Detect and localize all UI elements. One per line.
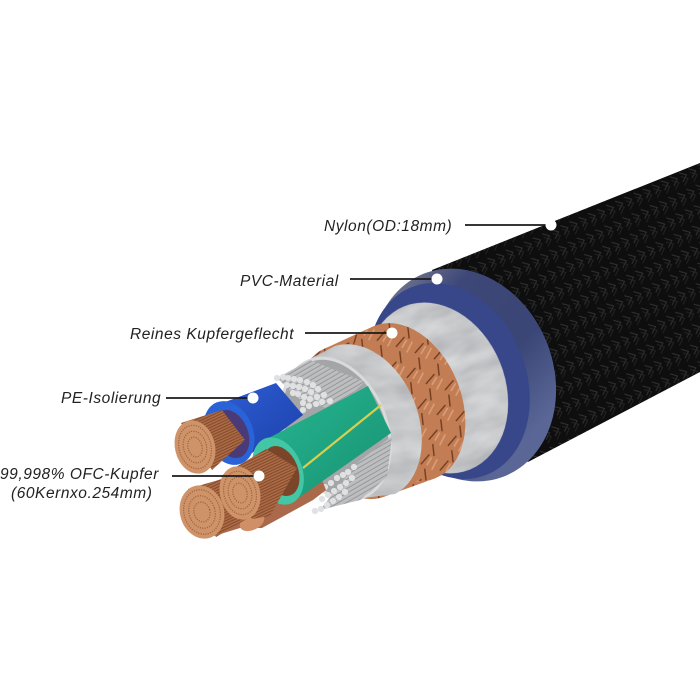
- grey foil shield rear section: [341, 281, 533, 495]
- label: PVC-Material: [240, 273, 442, 290]
- label: PVC-Material: PVC-Material: [240, 273, 339, 290]
- upper grey wire strands: [274, 360, 365, 413]
- nylon braided sheath: [432, 163, 700, 462]
- blue PE insulated conductor: [169, 383, 303, 478]
- grey foil shield front section: [260, 340, 422, 518]
- label: Reines Kupfergeflecht: [130, 326, 398, 343]
- lower grey wire strands: [312, 436, 392, 514]
- label: OFC copper: (60Kernxo.254mm): [11, 485, 152, 502]
- label: PE-Isolierung: PE-Isolierung: [61, 390, 161, 407]
- label: OFC copper: [0, 466, 264, 502]
- blue PVC ring: [340, 241, 587, 509]
- label: OFC copper: 99,998% OFC-Kupfer: [0, 466, 159, 483]
- lower copper conductor: [173, 470, 326, 544]
- label: PE-Isolierung: [61, 390, 258, 407]
- copper braid shield: [274, 305, 488, 517]
- label: Nylon: [324, 218, 556, 235]
- yellow stripe: [303, 405, 381, 468]
- label: Reines Kupfergeflecht: Reines Kupfergeflecht: [130, 326, 294, 343]
- label: Nylon: Nylon(OD:18mm): [324, 218, 452, 235]
- green insulated conductor with yellow stripe: [214, 386, 391, 524]
